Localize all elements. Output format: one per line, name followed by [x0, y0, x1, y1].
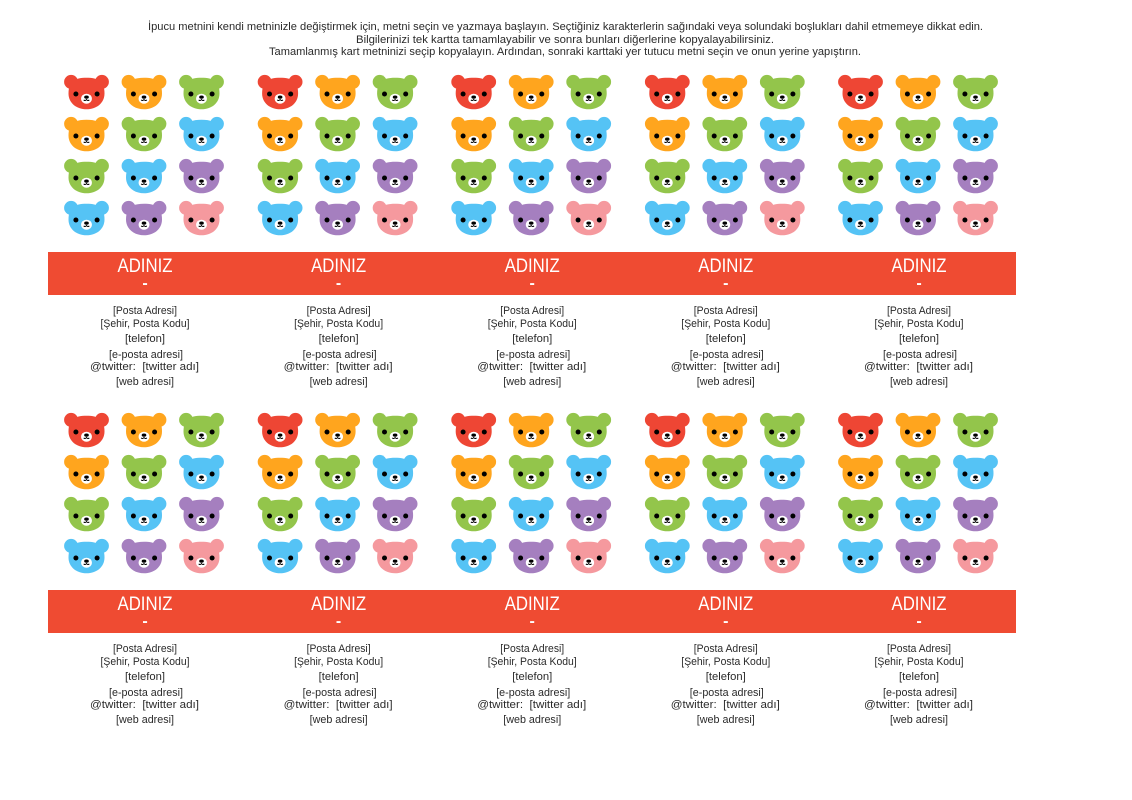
contact details	[671, 643, 780, 726]
contact details: [e-posta adresi]	[690, 349, 764, 361]
contact details: [web adresi]	[310, 376, 368, 388]
card 9	[645, 413, 805, 726]
contact details: [Posta Adresi]	[113, 305, 177, 317]
contact details	[284, 305, 393, 388]
contact details: [e-posta adresi]	[109, 687, 183, 699]
card 4	[645, 75, 805, 388]
contact details: [web adresi]	[503, 376, 561, 388]
contact details: [e-posta adresi]	[496, 687, 570, 699]
contact details: @twitter: [twitter adı]	[90, 699, 199, 711]
name: ADINIZ	[892, 255, 947, 277]
contact details: [e-posta adresi]	[883, 687, 957, 699]
contact details	[477, 643, 586, 726]
contact details: [e-posta adresi]	[690, 687, 764, 699]
card 1	[64, 75, 224, 388]
contact details	[864, 643, 973, 726]
bear icon grid	[838, 413, 998, 573]
contact details: [Posta Adresi]	[113, 643, 177, 655]
red band: bottom row	[48, 590, 1016, 633]
contact details: [telefon]	[319, 333, 359, 345]
contact details: [Şehir, Posta Kodu]	[874, 656, 964, 668]
bear icon grid	[838, 75, 998, 235]
contact details: [Posta Adresi]	[887, 643, 951, 655]
contact details	[864, 305, 973, 388]
name: ADINIZ	[311, 593, 366, 615]
contact details: [Posta Adresi]	[694, 643, 758, 655]
contact details: @twitter: [twitter adı]	[284, 361, 393, 373]
name: ADINIZ	[118, 255, 173, 277]
bear icon grid	[451, 413, 611, 573]
contact details: [Posta Adresi]	[694, 305, 758, 317]
contact details: [Şehir, Posta Kodu]	[488, 318, 577, 330]
bear icon grid	[64, 75, 224, 235]
bear icon grid	[258, 413, 418, 573]
card 6	[64, 413, 224, 726]
contact details: [Posta Adresi]	[307, 643, 371, 655]
contact details: [Şehir, Posta Kodu]	[488, 656, 577, 668]
card 3	[451, 75, 611, 388]
name: ADINIZ	[118, 593, 173, 615]
contact details: @twitter: [twitter adı]	[477, 699, 586, 711]
contact details: [Şehir, Posta Kodu]	[294, 318, 383, 330]
contact details: [telefon]	[899, 671, 939, 683]
title dash: -	[916, 275, 922, 292]
contact details: @twitter: [twitter adı]	[477, 361, 586, 373]
title dash: -	[142, 613, 148, 630]
red band: top row	[48, 252, 1016, 295]
contact details: @twitter: [twitter adı]	[671, 699, 780, 711]
contact details: [telefon]	[512, 333, 552, 345]
title dash: -	[336, 613, 341, 630]
bear icon grid	[645, 75, 805, 235]
contact details: [web adresi]	[697, 376, 755, 388]
instruction text	[148, 20, 983, 58]
title dash: -	[723, 275, 728, 292]
contact details: [Şehir, Posta Kodu]	[681, 318, 770, 330]
contact details: [web adresi]	[116, 714, 174, 726]
contact details: [e-posta adresi]	[109, 349, 183, 361]
contact details: [Posta Adresi]	[500, 643, 564, 655]
contact details: @twitter: [twitter adı]	[864, 699, 973, 711]
contact details: [web adresi]	[503, 714, 561, 726]
bear icon grid	[451, 75, 611, 235]
contact details: [Posta Adresi]	[500, 305, 564, 317]
contact details: [telefon]	[899, 333, 939, 345]
title dash: -	[530, 613, 535, 630]
bear icon grid	[64, 413, 224, 573]
instruction text: İpucu metnini kendi metninizle değiştirmek için, metni seçin ve yazmaya başlayın. Seçtiğiniz karakterlerin sağındaki veya solundaki boşlukları dahil etmemeye dikkat edin.	[148, 20, 983, 33]
title dash: -	[723, 613, 728, 630]
contact details: [web adresi]	[697, 714, 755, 726]
contact details: [Şehir, Posta Kodu]	[100, 318, 190, 330]
contact details: [Şehir, Posta Kodu]	[874, 318, 964, 330]
contact details	[477, 305, 586, 388]
contact details: [e-posta adresi]	[883, 349, 957, 361]
card 10	[838, 413, 998, 726]
contact details	[90, 643, 199, 726]
card 7	[258, 413, 418, 726]
name: ADINIZ	[892, 593, 947, 615]
contact details: [Posta Adresi]	[307, 305, 371, 317]
contact details	[284, 643, 393, 726]
contact details: [telefon]	[125, 333, 165, 345]
contact details: [telefon]	[319, 671, 359, 683]
bear icon grid	[645, 413, 805, 573]
title dash: -	[916, 613, 922, 630]
contact details: [web adresi]	[310, 714, 368, 726]
contact details: [web adresi]	[116, 376, 174, 388]
bear icon grid	[258, 75, 418, 235]
name: ADINIZ	[505, 255, 560, 277]
contact details: @twitter: [twitter adı]	[864, 361, 973, 373]
contact details: [web adresi]	[890, 714, 948, 726]
name: ADINIZ	[698, 255, 753, 277]
contact details: [Şehir, Posta Kodu]	[294, 656, 383, 668]
contact details: @twitter: [twitter adı]	[671, 361, 780, 373]
contact details: [telefon]	[706, 333, 746, 345]
contact details: [Posta Adresi]	[887, 305, 951, 317]
contact details: [e-posta adresi]	[303, 687, 377, 699]
contact details: [e-posta adresi]	[303, 349, 377, 361]
title dash: -	[142, 275, 148, 292]
card 8	[451, 413, 611, 726]
title dash: -	[336, 275, 341, 292]
contact details: [telefon]	[706, 671, 746, 683]
instruction text: Tamamlanmış kart metninizi seçip kopyalayın. Ardından, sonraki karttaki yer tutucu metni seçin ve onun yerine yapıştırın.	[269, 46, 861, 58]
card 2	[258, 75, 418, 388]
contact details: [Şehir, Posta Kodu]	[100, 656, 190, 668]
card 5	[838, 75, 998, 388]
name: ADINIZ	[311, 255, 366, 277]
title dash: -	[530, 275, 535, 292]
contact details: @twitter: [twitter adı]	[284, 699, 393, 711]
instruction text: Bilgilerinizi tek kartta tamamlayabilir ve sonra bunları diğerlerine kopyalayabilirsiniz.	[356, 34, 774, 46]
name: ADINIZ	[505, 593, 560, 615]
contact details: [telefon]	[125, 671, 165, 683]
contact details: [Şehir, Posta Kodu]	[681, 656, 770, 668]
contact details: [telefon]	[512, 671, 552, 683]
name: ADINIZ	[698, 593, 753, 615]
contact details: [web adresi]	[890, 376, 948, 388]
contact details	[90, 305, 199, 388]
contact details: [e-posta adresi]	[496, 349, 570, 361]
contact details	[671, 305, 780, 388]
contact details: @twitter: [twitter adı]	[90, 361, 199, 373]
